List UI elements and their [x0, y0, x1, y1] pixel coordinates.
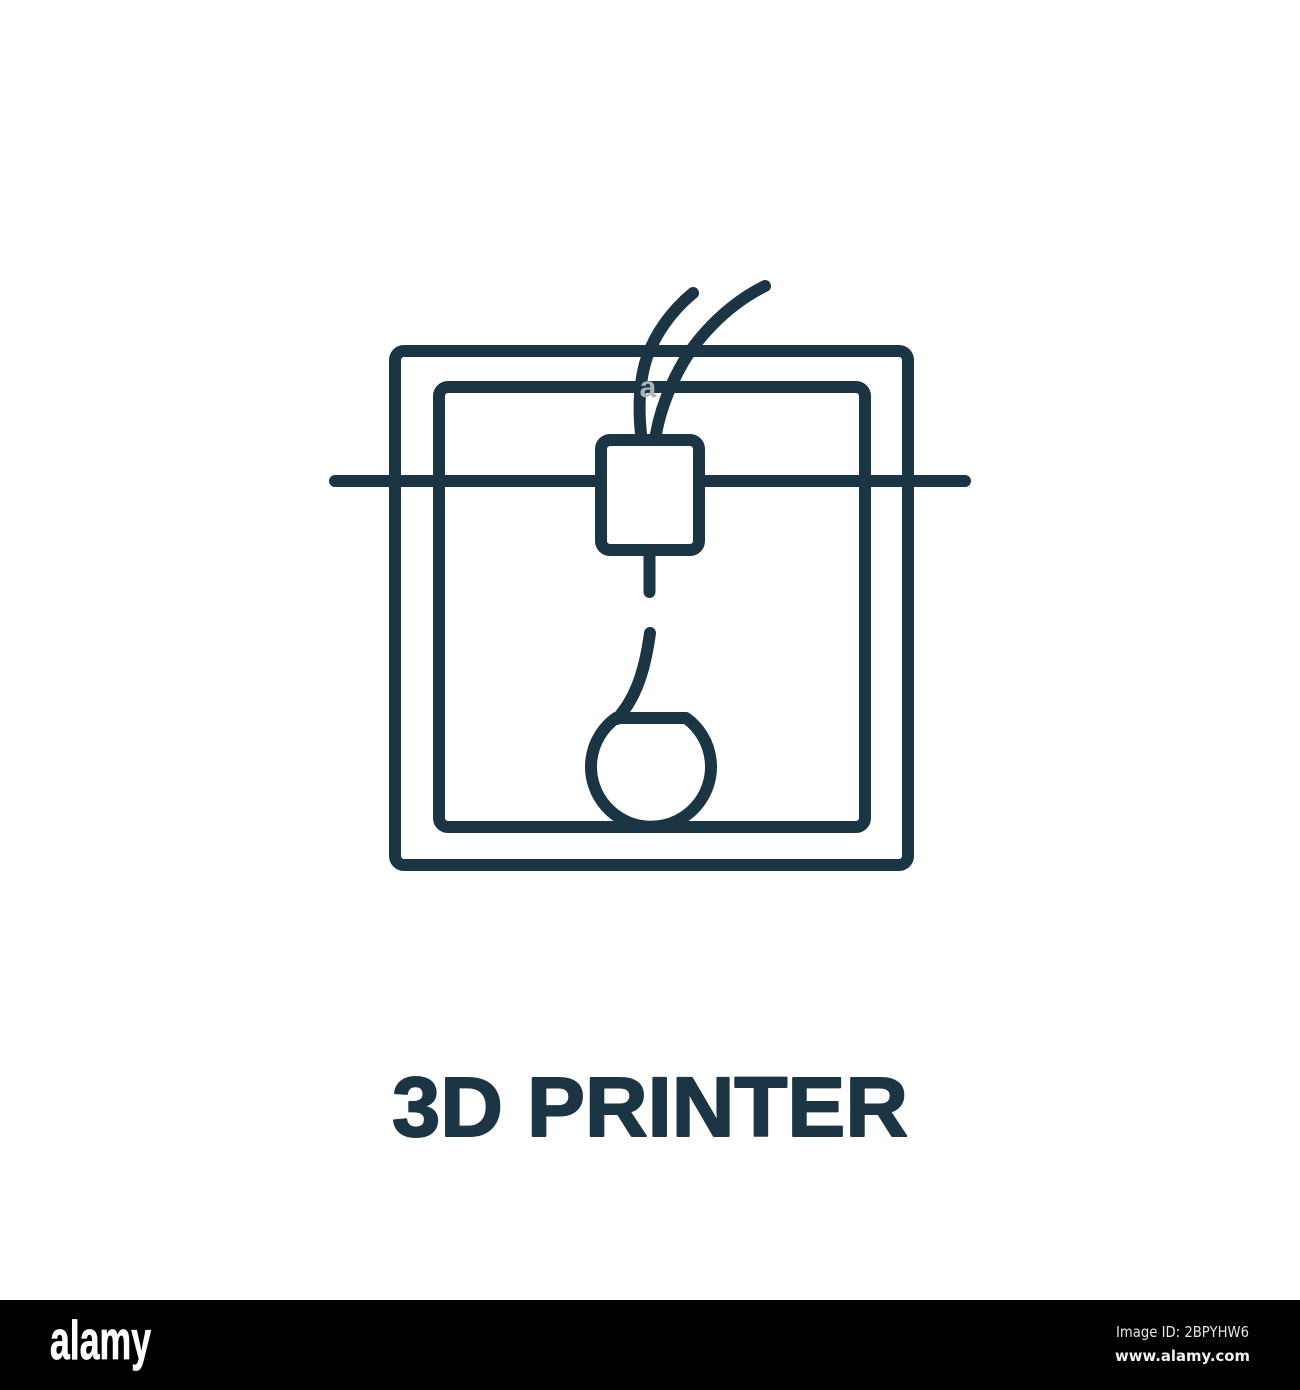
watermark fragment on filament: a	[640, 371, 657, 404]
footer logo: alamy	[50, 1309, 151, 1371]
icon: 3D printer	[335, 286, 965, 865]
inner frame	[439, 387, 865, 827]
title: 3D PRINTER	[392, 1060, 908, 1154]
horizontal rail	[335, 475, 965, 487]
filament strands	[640, 286, 765, 434]
footer bar	[0, 1300, 1300, 1390]
outer frame	[395, 351, 908, 865]
printed object	[591, 633, 711, 827]
nozzle	[644, 552, 656, 592]
image id: Image ID: 2BPYHW6	[1116, 1323, 1249, 1341]
website: www.alamy.com	[1115, 1347, 1250, 1365]
print head	[601, 440, 699, 550]
